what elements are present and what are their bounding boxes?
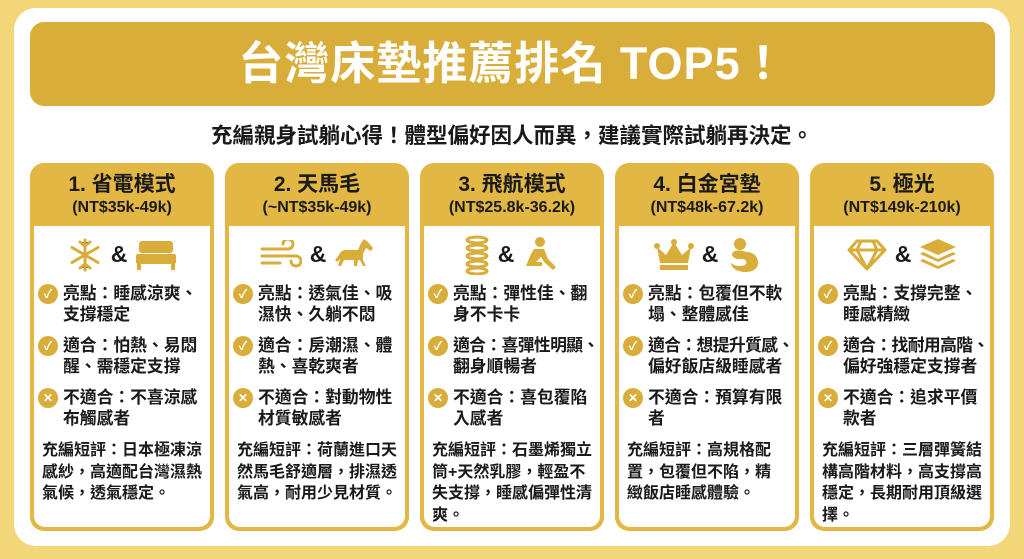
row: highlight: [233, 284, 392, 324]
card 1: (NT$35k-49k): [72, 199, 172, 216]
subtitle: 充編親身試躺心得！體型偏好因人而異，建議實際試躺再決定。: [211, 124, 813, 148]
row: highlight: 睡感精緻: [843, 305, 910, 324]
row: suitable: 偏好強穩定支撐者: [843, 357, 977, 376]
note: 筒+天然乳膠，輕盈不: [432, 464, 585, 480]
row: highlight: ✓: [824, 287, 832, 301]
row: suitable: 偏好飯店級睡感者: [648, 357, 782, 376]
card 1: [30, 163, 214, 531]
card 3: 3. 飛航模式: [458, 173, 566, 196]
row: unsuitable: ✕: [433, 391, 443, 405]
note: 氣候，透氣穩定。: [42, 485, 170, 502]
note: 充編短評：石墨烯獨立: [432, 442, 592, 459]
row: highlight: 亮點：包覆但不軟: [648, 284, 782, 303]
row: unsuitable: 不適合：對動物性: [258, 388, 392, 407]
note: 緻飯店睡感體驗。: [627, 485, 755, 502]
row: suitable: [233, 336, 392, 376]
note: 氣高，耐用少見材質。: [237, 485, 397, 502]
card 2: (~NT$35k-49k): [263, 199, 371, 216]
row: highlight: [38, 284, 197, 324]
note: [822, 441, 982, 524]
icons: diamond & layers: &: [895, 241, 911, 267]
row: highlight: [818, 284, 977, 324]
icons: spring & person: [466, 236, 556, 275]
row: highlight: 亮點：彈性佳、翻: [453, 284, 587, 303]
note: 穩定，長期耐用頂級選: [822, 485, 982, 502]
row: suitable: 適合：找耐用高階、: [843, 336, 989, 355]
note: 充編短評：日本極凍涼: [42, 442, 202, 459]
row: unsuitable: 款者: [843, 409, 877, 428]
card 5: [810, 163, 994, 531]
row: unsuitable: 入感者: [453, 409, 503, 428]
row: suitable: 翻身順暢者: [453, 357, 537, 376]
icons: diamond & layers: [847, 239, 956, 271]
note: 擇。: [822, 506, 854, 524]
row: highlight: 支撐穩定: [63, 305, 130, 324]
row: unsuitable: [818, 388, 977, 428]
icons: spring & person: &: [498, 241, 514, 267]
row: unsuitable: ✕: [43, 391, 53, 405]
row: highlight: 身不卡卡: [453, 305, 520, 324]
card 2: 2. 天馬毛: [274, 173, 360, 196]
icons: snowflake & bed: &: [111, 241, 127, 267]
card 3: [420, 163, 604, 531]
row: unsuitable: [38, 388, 197, 428]
row: suitable: 熱、喜乾爽者: [258, 357, 359, 376]
row: suitable: [623, 336, 794, 376]
title: [30, 22, 995, 106]
row: unsuitable: 布觸感者: [63, 409, 130, 428]
row: unsuitable: 不適合：喜包覆陷: [453, 388, 587, 407]
row: highlight: ✓: [434, 287, 442, 301]
icons: wind & horse: [260, 239, 373, 268]
row: suitable: 醒、需穩定支撐: [63, 357, 180, 376]
note: [432, 441, 592, 524]
note: 充編短評：高規格配: [627, 442, 771, 459]
row: suitable: [428, 336, 599, 376]
row: unsuitable: [428, 388, 587, 428]
note: 然馬毛舒適層，排濕透: [237, 464, 397, 480]
note: 充編短評：三層彈簧結: [822, 442, 982, 459]
row: suitable: 適合：想提升質感、: [648, 336, 794, 355]
row: suitable: ✓: [434, 339, 442, 353]
row: suitable: ✓: [629, 339, 637, 353]
note: [237, 441, 397, 502]
note: 失支撐，睡感偏彈性清: [432, 485, 592, 502]
row: highlight: 亮點：透氣佳、吸: [258, 284, 392, 303]
note: 感紗，高適配台灣濕熱: [42, 464, 202, 480]
row: suitable: [818, 336, 989, 376]
card 3: (NT$25.8k-36.2k): [449, 199, 575, 216]
row: unsuitable: 不適合：預算有限: [648, 388, 782, 407]
icons: crown & hug: [654, 238, 758, 272]
row: highlight: ✓: [629, 287, 637, 301]
card 4: 4. 白金宮墊: [653, 173, 761, 196]
card 2: [225, 163, 409, 531]
row: unsuitable: 不適合：追求平價: [843, 388, 977, 407]
row: suitable: ✓: [824, 339, 832, 353]
icons: wind & horse: &: [310, 241, 326, 267]
row: highlight: [428, 284, 587, 324]
card 4: [615, 163, 799, 531]
row: unsuitable: [233, 388, 392, 428]
card 5: 5. 極光: [869, 173, 935, 196]
row: highlight: ✓: [44, 287, 52, 301]
note: [627, 441, 771, 502]
row: suitable: 適合：怕熱、易悶: [63, 336, 197, 355]
row: highlight: 塌、整體感佳: [648, 305, 749, 324]
card 1: 1. 省電模式: [68, 173, 176, 196]
note: 構高階材料，高支撐高: [822, 464, 982, 480]
note: 置，包覆但不陷，精: [627, 464, 771, 480]
row: unsuitable: ✕: [628, 391, 638, 405]
icons: snowflake & bed: [70, 238, 176, 272]
card 4: (NT$48k-67.2k): [651, 199, 763, 216]
note: [42, 441, 202, 502]
row: suitable: 適合：房潮濕、體: [258, 336, 392, 355]
title: 台灣床墊推薦排名 TOP5！: [238, 38, 787, 89]
card 5: (NT$149k-210k): [843, 199, 961, 216]
row: highlight: 亮點：睡感涼爽、: [63, 284, 197, 303]
row: highlight: 濕快、久躺不悶: [258, 305, 375, 324]
row: unsuitable: 材質敏感者: [258, 409, 342, 428]
row: highlight: [623, 284, 782, 324]
row: suitable: [38, 336, 197, 376]
row: unsuitable: ✕: [823, 391, 833, 405]
icons: crown & hug: &: [702, 241, 718, 267]
note: 充編短評：荷蘭進口天: [237, 442, 397, 459]
row: unsuitable: 不適合：不喜涼感: [63, 388, 197, 407]
note: 爽。: [432, 506, 464, 524]
row: highlight: ✓: [239, 287, 247, 301]
row: suitable: ✓: [44, 339, 52, 353]
row: highlight: 亮點：支撐完整、: [843, 284, 977, 303]
row: unsuitable: ✕: [238, 391, 248, 405]
row: suitable: ✓: [239, 339, 247, 353]
row: suitable: 適合：喜彈性明顯、: [453, 336, 599, 355]
row: unsuitable: 者: [648, 409, 665, 428]
row: unsuitable: [623, 388, 782, 428]
